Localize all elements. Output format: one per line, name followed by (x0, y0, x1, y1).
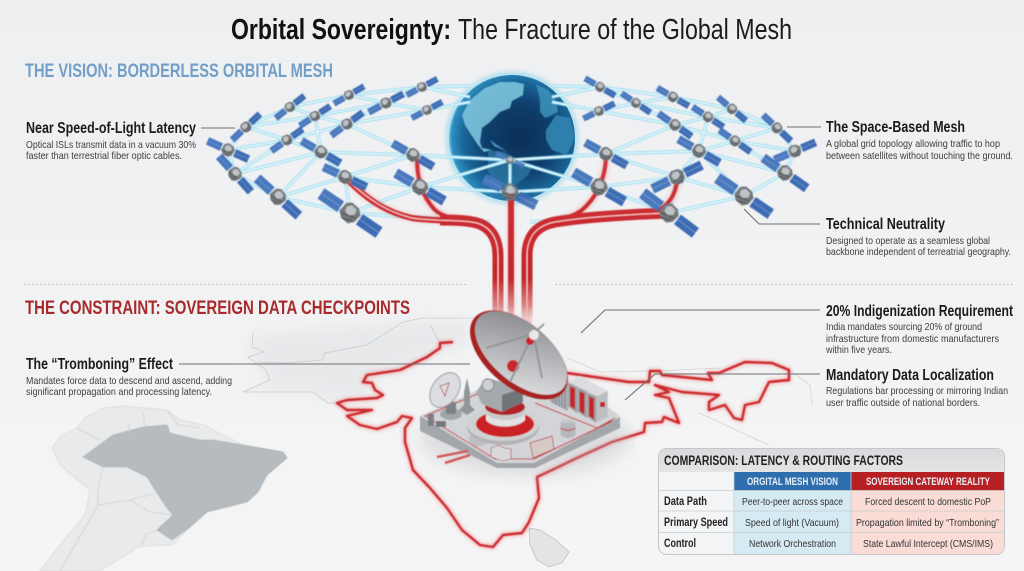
title: The Fracture of the Global Mesh (458, 14, 792, 46)
satellites (205, 74, 818, 241)
pedestal (467, 409, 539, 445)
brazil (83, 425, 287, 540)
map: neighbouring territories (243, 318, 812, 567)
callout: near speed-of-light latency: faster than terrestrial fiber optic cables. (26, 150, 182, 162)
column: orbital mesh vision: Network Orchestration (749, 538, 836, 550)
small equipment (428, 414, 576, 461)
callout: the space-based mesh (787, 119, 1013, 162)
callout: near speed-of-light latency: Optical ISLs transmit data in a vacuum 30% (26, 139, 196, 151)
callout: the space-based mesh: The Space-Based Mesh (826, 119, 965, 136)
small dish (423, 367, 467, 420)
callout: technical neutrality: Designed to operate as a seamless global (826, 235, 990, 247)
column: orbital mesh vision: ORGITAL MESH VISION (747, 476, 838, 488)
column: orbital mesh vision (734, 472, 851, 554)
row labels (664, 496, 728, 550)
main dish (454, 293, 584, 417)
section divider (24, 284, 1014, 286)
column: sovereign gateway reality: Forced descent to domestic PoP (865, 496, 991, 508)
row labels: Data Path (664, 496, 707, 508)
callout: indigenization requirement: India mandates sourcing 20% of ground (826, 321, 982, 333)
red downlink tubes (345, 158, 677, 330)
south america (488, 150, 534, 205)
ground station (420, 293, 630, 476)
column: sovereign gateway reality: Propagation limited by “Tromboning” (856, 517, 999, 529)
title: Orbital Sovereignty: (231, 14, 451, 46)
platform (420, 416, 620, 468)
callout: indigenization requirement: infrastructure from domestic manufacturers (826, 333, 999, 345)
globe (445, 71, 579, 205)
table title: COMPARISON: LATENCY & ROUTING FACTORS (664, 453, 903, 468)
callout: tromboning effect: significant propagation and processing latency. (26, 386, 212, 398)
title (231, 14, 792, 46)
map: india red border (337, 342, 789, 547)
callout: mandatory data localization (625, 367, 1008, 409)
callout: indigenization requirement: within five years. (825, 344, 892, 356)
callout: technical neutrality: Technical Neutrality (826, 216, 945, 233)
row labels: Primary Speed (664, 517, 728, 529)
callout: the space-based mesh: A global grid topology allowing traffic to hop (826, 138, 1000, 150)
comparison table (658, 448, 1004, 554)
north america (462, 82, 524, 152)
sri lanka (529, 528, 569, 567)
callout: indigenization requirement (581, 303, 1014, 356)
callout: tromboning effect: Mandates force data to descend and ascend, adding (26, 375, 232, 387)
callout: near speed-of-light latency (26, 120, 235, 162)
mesh links (228, 86, 795, 222)
column: orbital mesh vision: Peer-to-peer across space (742, 496, 843, 508)
callout: tromboning effect (26, 356, 470, 398)
callout: mandatory data localization: user traffic outside of national borders. (826, 397, 980, 409)
callout: technical neutrality (744, 209, 1011, 258)
column: sovereign gateway reality (851, 472, 1004, 554)
heading: the constraint: THE CONSTRAINT: SOVEREIGN DATA CHECKPOINTS (25, 297, 410, 319)
africa (546, 115, 575, 155)
server racks (550, 376, 608, 423)
heading: the vision: THE VISION: BORDERLESS ORBITAL MESH (25, 60, 333, 82)
table title (659, 449, 1004, 472)
dish mount (476, 378, 523, 412)
row labels: Control (664, 538, 696, 550)
europe (536, 84, 558, 118)
callout: tromboning effect: The “Tromboning” Effect (26, 356, 174, 373)
callout: near speed-of-light latency: Near Speed-of-Light Latency (26, 120, 196, 137)
equipment tower (459, 378, 475, 415)
column: orbital mesh vision: Speed of light (Vacuum) (745, 517, 839, 529)
column: sovereign gateway reality: State Lawful Intercept (CMS/IMS) (863, 538, 993, 550)
map: south america (40, 406, 287, 571)
